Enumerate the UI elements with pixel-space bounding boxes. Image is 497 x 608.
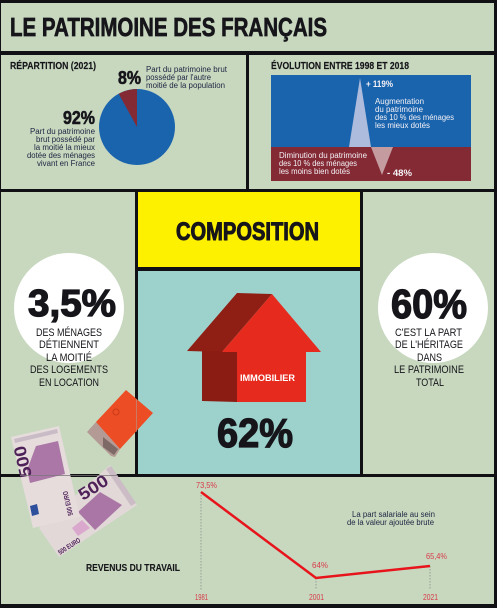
text: logements: DES MÉNAGES (36, 326, 102, 339)
panel: immobilier (138, 271, 360, 474)
panel: title (1, 3, 494, 51)
heading: évolution: ÉVOLUTION ENTRE 1998 ET 2018 (271, 59, 409, 72)
panel: héritage (363, 192, 494, 474)
panel: répartition (1, 55, 246, 189)
heading: répartition: RÉPARTITION (2021) (10, 59, 96, 72)
text: logements: EN LOCATION (39, 377, 99, 389)
text: part salariale: de la valeur ajoutée brute (347, 518, 435, 527)
stat: 8%: 8% (118, 68, 141, 88)
icon: banknote front (10, 426, 118, 528)
chart: évolution: Diminution du patrimoine (279, 151, 368, 160)
text: part 92%: brut possédé par (36, 135, 95, 144)
text: part 92%: la moitié la mieux (34, 143, 95, 152)
icon: house (187, 293, 321, 402)
panel: composition heading (138, 192, 360, 267)
text: logements: LA MOITIÉ (46, 351, 92, 364)
text: héritage: LE PATRIMOINE (394, 364, 464, 376)
line chart: 2001 (309, 593, 324, 602)
icon: banknote front: 500 EURO (62, 490, 75, 516)
chart: évolution: des 10 % des ménages (375, 113, 454, 122)
circle: white (14, 253, 124, 363)
icon: banknote front: 500 (10, 444, 36, 479)
title: LE PATRIMOINE DES FRANÇAIS (10, 12, 327, 42)
icon: banknote back: 500 EURO (57, 537, 82, 557)
text: part salariale (347, 510, 435, 527)
icon: house: IMMOBILIER (240, 373, 295, 384)
stat: 92%: 92% (63, 108, 95, 128)
chart: évolution (271, 75, 471, 181)
heading: composition: COMPOSITION (176, 218, 319, 246)
pie chart (99, 89, 175, 165)
chart: évolution: + 119% (366, 79, 393, 89)
text: héritage (394, 327, 464, 389)
chart: évolution: - 48% (387, 168, 412, 178)
text: héritage: DE L'HÉRITAGE (395, 338, 463, 351)
text: logements (30, 326, 108, 389)
chart: évolution: Augmentation (375, 97, 424, 106)
chart: évolution: les moins bien dotés (279, 167, 350, 176)
panel: revenus du travail (1, 477, 494, 604)
line chart: 65,4% (426, 552, 447, 561)
text: part salariale: La part salariale au sein (352, 510, 435, 519)
icon: banknote back: 500 (75, 471, 112, 504)
line chart: 64% (312, 561, 328, 570)
text: héritage: C'EST LA PART (395, 327, 462, 339)
line chart (195, 481, 447, 602)
circle: white (378, 253, 488, 363)
panel: logements (1, 192, 135, 474)
panel: évolution (249, 55, 494, 189)
heading: revenus: REVENUS DU TRAVAIL (86, 563, 180, 574)
line chart: 73,5% (196, 481, 217, 490)
stat: 3,5%: 3,5% (28, 283, 116, 325)
text: part 8%: Part du patrimoine brut (146, 65, 228, 74)
line chart: 2021 (423, 593, 438, 602)
text: part 92% (27, 127, 96, 168)
chart: évolution: des 10 % des ménages (279, 159, 357, 168)
icon: orange house (87, 390, 153, 457)
text: héritage: DANS (417, 352, 442, 364)
stat: 62%: 62% (217, 410, 293, 456)
icon: banknote back (39, 465, 137, 557)
stat: 60%: 60% (391, 281, 467, 327)
text: part 8%: moitié de la population (146, 81, 225, 90)
text: logements: DES LOGEMENTS (30, 364, 108, 376)
text: part 92%: vivant en France (37, 159, 96, 168)
text: héritage: TOTAL (416, 377, 444, 389)
chart: évolution: du patrimoine (375, 105, 424, 114)
text: part 92%: dotée des ménages (27, 151, 95, 160)
chart: évolution: les mieux dotés (375, 121, 430, 130)
line chart: 1981 (195, 593, 208, 602)
text: part 8% (146, 65, 228, 90)
text: part 8%: possédé par l'autre (146, 73, 212, 82)
text: logements: DÉTIENNENT (39, 338, 99, 351)
text: part 92%: Part du patrimoine (30, 127, 96, 136)
